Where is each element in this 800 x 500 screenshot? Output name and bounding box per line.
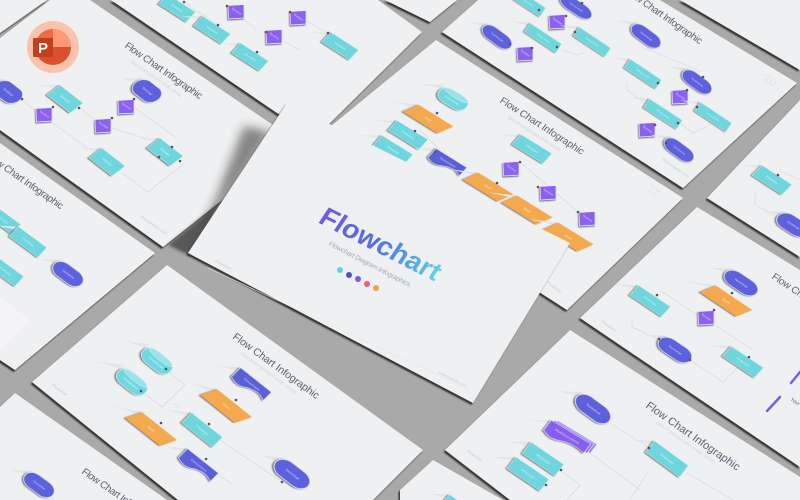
panel: slide right middle: Process (643, 296, 657, 307)
panel: slide behind cover: Process (525, 144, 539, 154)
panel: slide top middle: Process (170, 3, 184, 13)
panel: slide behind cover: Database (444, 95, 460, 106)
panel: slide bottom right: Flowchart (466, 449, 484, 463)
panel: slide bottom right: Terminal (585, 402, 601, 416)
panel: slide right middle: Terminal (667, 345, 683, 356)
panel: slide with PowerPoint badge: Terminal (141, 86, 153, 96)
panel: slide bottom centre: Sed ut perspiciatis unde omnis (239, 351, 298, 396)
panel: slide behind cover: Decision (506, 163, 517, 173)
heading: slide centre-right title: Flow Chart Infographic (497, 96, 586, 157)
panel: slide behind cover: Sed ut perspiciatis unde omnis (506, 115, 562, 153)
cover slide hard shadow (168, 202, 220, 256)
panel: slide middle left: Terminal (61, 269, 75, 280)
panel: slide bottom right (445, 330, 800, 500)
panel: slide top middle: Decision (293, 12, 304, 22)
panel: slide right upper: Process (765, 175, 779, 185)
panel: slide middle left: Process (21, 237, 35, 248)
icon: multidocument stack: Multidocument (554, 428, 580, 445)
panel: slide bottom left (0, 393, 167, 500)
icon: PowerPoint badge (27, 21, 79, 73)
panel: slide bottom centre: Terminal (284, 467, 300, 481)
panel: slide behind cover: Process (401, 130, 415, 140)
icon: PowerPoint badge: P (38, 40, 48, 57)
panel: slide behind cover: Start (563, 234, 573, 240)
panel: slide top middle: Process (333, 41, 347, 51)
panel: slide behind cover: Decision (582, 213, 593, 223)
panel: slide top right (442, 0, 797, 188)
panel: slide with PowerPoint badge: Terminal (2, 87, 14, 97)
panel: cover slide (188, 103, 570, 403)
panel: slide top right: Decision (675, 91, 686, 101)
panel: slide top right: Terminal (672, 145, 686, 156)
panel: slide top right: Terminal (490, 32, 504, 43)
panel: slide behind cover: Flowchart (545, 280, 563, 294)
slide: top small (385, 0, 457, 22)
panel: slide bottom centre: Start (146, 425, 156, 433)
panel: slide top middle: Process (243, 52, 257, 62)
panel: slide with PowerPoint badge: Process (59, 94, 71, 104)
panel: slide with PowerPoint badge (0, 0, 295, 247)
panel: slide top right: Process (536, 33, 550, 43)
panel: slide with PowerPoint badge: Decision (98, 120, 109, 130)
panel: slide right middle: Terminal (733, 278, 749, 289)
panel: slide behind cover: Decision (543, 187, 554, 197)
slide: top-left corner (0, 0, 47, 33)
panel: cover slide: Flowchart (214, 259, 233, 271)
panel: slide bottom right: Process (659, 452, 675, 465)
panel: slide with PowerPoint badge: www.website.com (139, 214, 169, 236)
panel: slide top right: Terminal (569, 2, 583, 13)
panel: slide right middle: Process (736, 357, 750, 368)
panel: cover slide: www.website.com (437, 370, 469, 389)
panel: slide right middle: Start (721, 297, 731, 305)
panel: slide top right: Decision (520, 48, 531, 58)
panel: slide right upper: Terminal (786, 220, 800, 230)
colour dots (337, 267, 379, 291)
panel: slide middle left (0, 143, 155, 370)
panel: slide bottom centre: Start (221, 402, 231, 410)
panel: slide bottom centre: Flowchart (51, 383, 69, 397)
panel: slide bottom left: Terminal (32, 480, 46, 491)
panel: slide top right: Decision (552, 16, 563, 26)
panel: slide top middle: Decision (231, 6, 242, 16)
panel: slide top right: Process (636, 69, 650, 79)
panel: slide top middle (111, 0, 422, 135)
panel: slide behind cover: 27 (644, 183, 661, 199)
panel: slide top right: Decision (642, 124, 653, 134)
panel: slide behind cover (320, 40, 683, 310)
panel: slide bottom centre: Document (190, 458, 207, 473)
panel: slide top middle: Decision (269, 31, 280, 41)
heading: slide bottom-right title: Flow Chart Infographic (643, 400, 743, 474)
title: Flowchart: Flowchart (314, 202, 448, 286)
panel: slide top right: Terminal (690, 77, 704, 88)
panel: slide top right: Process (585, 37, 599, 47)
panel: slide bottom centre: Database (122, 377, 139, 390)
subtitle: Flowchart Diagram Infographics (327, 241, 412, 289)
panel: slide top right: www.website.com (661, 157, 691, 179)
cover slide soft shadow (195, 126, 272, 250)
panel: slide behind cover: Start (483, 184, 493, 190)
panel: slide right middle (580, 207, 800, 467)
panel: slide right upper (707, 100, 800, 257)
panel: slide top right: Process (656, 109, 670, 120)
panel: slide with PowerPoint badge: Process (101, 157, 113, 167)
panel: slide right middle: Decision (701, 312, 712, 322)
panel: slide bottom centre: Process (195, 424, 209, 436)
panel: slide with PowerPoint badge: Sed ut perspiciatis unde omnis (129, 59, 184, 99)
slide: top right corner (680, 0, 800, 70)
panel: slide top right: Terminal (639, 31, 653, 42)
panel: slide bottom right: Process (536, 453, 550, 465)
panel: slide bottom centre: Database (147, 356, 164, 369)
panel: slide behind cover: Process (386, 145, 400, 155)
panel: slide behind cover: Document (439, 156, 456, 168)
panel: slide bottom right: Sed ut perspiciatis unde omnis (654, 420, 717, 466)
panel: slide top right: Process (706, 112, 720, 122)
panel: slide with PowerPoint badge: Decision (39, 109, 50, 119)
panel: slide right middle: Flowchart (600, 319, 618, 333)
panel: slide bottom centre: Document (243, 377, 260, 392)
panel: slide behind cover: Start (522, 207, 532, 213)
panel: slide bottom centre (32, 265, 423, 500)
slide: bottom small (400, 460, 503, 500)
panel: slide top right: 20 (761, 73, 778, 89)
panel: slide with PowerPoint badge: Process (159, 147, 171, 157)
panel: slide behind cover: Start (423, 116, 433, 122)
icon: multidocument stack (526, 408, 597, 459)
panel: slide with PowerPoint badge: Decision (121, 101, 132, 111)
panel: slide top middle: Process (205, 25, 219, 35)
heading: slide top-left title: Flow Chart Infographic (122, 41, 204, 102)
panel: slide bottom right: Process (521, 468, 535, 480)
heading: slide bottom-centre title: Flow Chart Infographic (230, 331, 322, 402)
